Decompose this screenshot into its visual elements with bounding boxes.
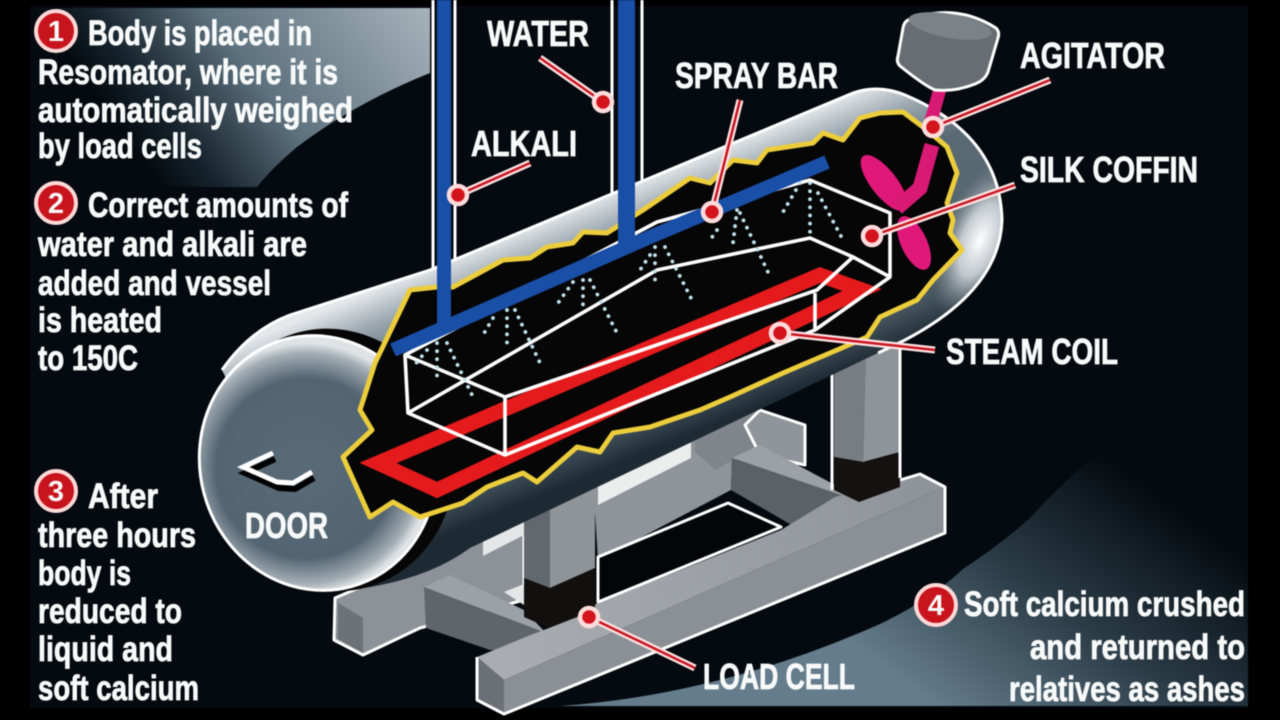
label: agitator: AGITATOR	[1020, 35, 1165, 76]
grey swoosh bottom right	[560, 454, 1248, 706]
tank end highlight	[936, 173, 1002, 311]
step 1 text block: Resomator, where it is	[38, 53, 338, 92]
step 4 text block: and returned to	[1030, 628, 1245, 667]
label: silk coffin: SILK COFFIN	[1020, 149, 1198, 190]
front beam end	[477, 657, 504, 715]
step 1 text block: automatically weighed	[38, 91, 353, 130]
step 2 badge	[36, 183, 76, 223]
spray droplets	[413, 183, 843, 397]
label: spray bar	[675, 55, 838, 221]
step 1 badge	[36, 11, 76, 51]
right post	[832, 340, 900, 502]
cutaway interior with yellow jagged edge	[343, 112, 962, 517]
door	[171, 309, 465, 617]
step 3 badge	[36, 471, 76, 511]
front beam side	[504, 487, 945, 715]
step 3 text block: reduced to	[38, 592, 182, 631]
step 1 badge: 1	[48, 16, 64, 48]
label: door: DOOR	[245, 505, 328, 546]
front beam outline	[477, 474, 945, 714]
back rail	[593, 437, 732, 560]
left post	[524, 450, 595, 628]
step 3 text block	[36, 471, 199, 708]
frame opening	[598, 503, 781, 602]
back rail highlight	[598, 440, 691, 505]
agitator blades	[853, 145, 938, 275]
rear left beam end face	[338, 603, 363, 653]
tank outline	[222, 89, 1002, 370]
step 3 text block: three hours	[38, 516, 196, 555]
front beam top	[477, 475, 945, 680]
cross beam left top	[424, 575, 546, 633]
rear rail highlight left	[483, 518, 524, 556]
step 1 text block: by load cells	[38, 127, 202, 166]
rear left beam	[334, 520, 524, 655]
shaft	[897, 145, 932, 208]
step 2 badge: 2	[48, 188, 64, 220]
step 3 text block: liquid and	[38, 630, 173, 669]
back centre block	[695, 398, 757, 470]
label: spray bar: SPRAY BAR	[675, 55, 838, 96]
spray bar	[393, 162, 827, 350]
step 3 text block: After	[88, 477, 158, 516]
agitator motor	[897, 7, 999, 125]
step 2 text block: to 150C	[38, 339, 138, 378]
motor body	[897, 13, 999, 90]
label: agitator	[924, 35, 1165, 136]
back small beam	[745, 410, 805, 465]
small highlight at post foot	[504, 584, 524, 605]
label: load cell	[580, 608, 855, 697]
door handle	[243, 453, 314, 489]
step 4 badge: 4	[928, 590, 944, 622]
motor stem	[930, 85, 941, 125]
cross beam right top	[732, 445, 855, 500]
label: water	[487, 13, 612, 111]
dark rim behind door	[180, 301, 484, 619]
step 1 text block: Body is placed in	[88, 14, 312, 53]
upper blade	[853, 148, 915, 218]
step 3 text block: soft calcium	[38, 669, 199, 708]
step 2 text block: Correct amounts of	[88, 186, 348, 225]
alkali pipe	[437, 0, 451, 326]
step 3 badge: 3	[48, 476, 64, 508]
step 2 text block: water and alkali are	[37, 225, 307, 264]
label: alkali	[449, 123, 577, 204]
silk coffin wireframe	[405, 180, 890, 455]
step 4 badge	[916, 585, 956, 625]
motor top	[907, 7, 993, 45]
step 2 text block: is heated	[38, 301, 162, 340]
label: steam coil	[771, 324, 1118, 372]
step 4 text block	[916, 585, 1245, 709]
lower blade	[890, 211, 938, 275]
step 1 text block	[36, 11, 353, 166]
step 2 text block	[36, 183, 348, 378]
cross beam right side	[731, 458, 855, 527]
label: alkali: ALKALI	[471, 123, 577, 164]
cross beam left side	[424, 587, 546, 650]
support frame	[334, 340, 945, 715]
step 2 text block: added and vessel	[38, 264, 271, 303]
pipe casing outlines above tank	[433, 0, 642, 272]
label: load cell: LOAD CELL	[703, 656, 855, 697]
label: water: WATER	[487, 13, 589, 54]
water pipe	[618, 0, 635, 246]
tank body	[222, 89, 1002, 592]
label: silk coffin	[863, 149, 1198, 245]
grey swoosh top left	[30, 8, 430, 187]
steam coil	[378, 275, 862, 490]
label: steam coil: STEAM COIL	[946, 331, 1118, 372]
step 3 text block: body is	[38, 554, 131, 593]
